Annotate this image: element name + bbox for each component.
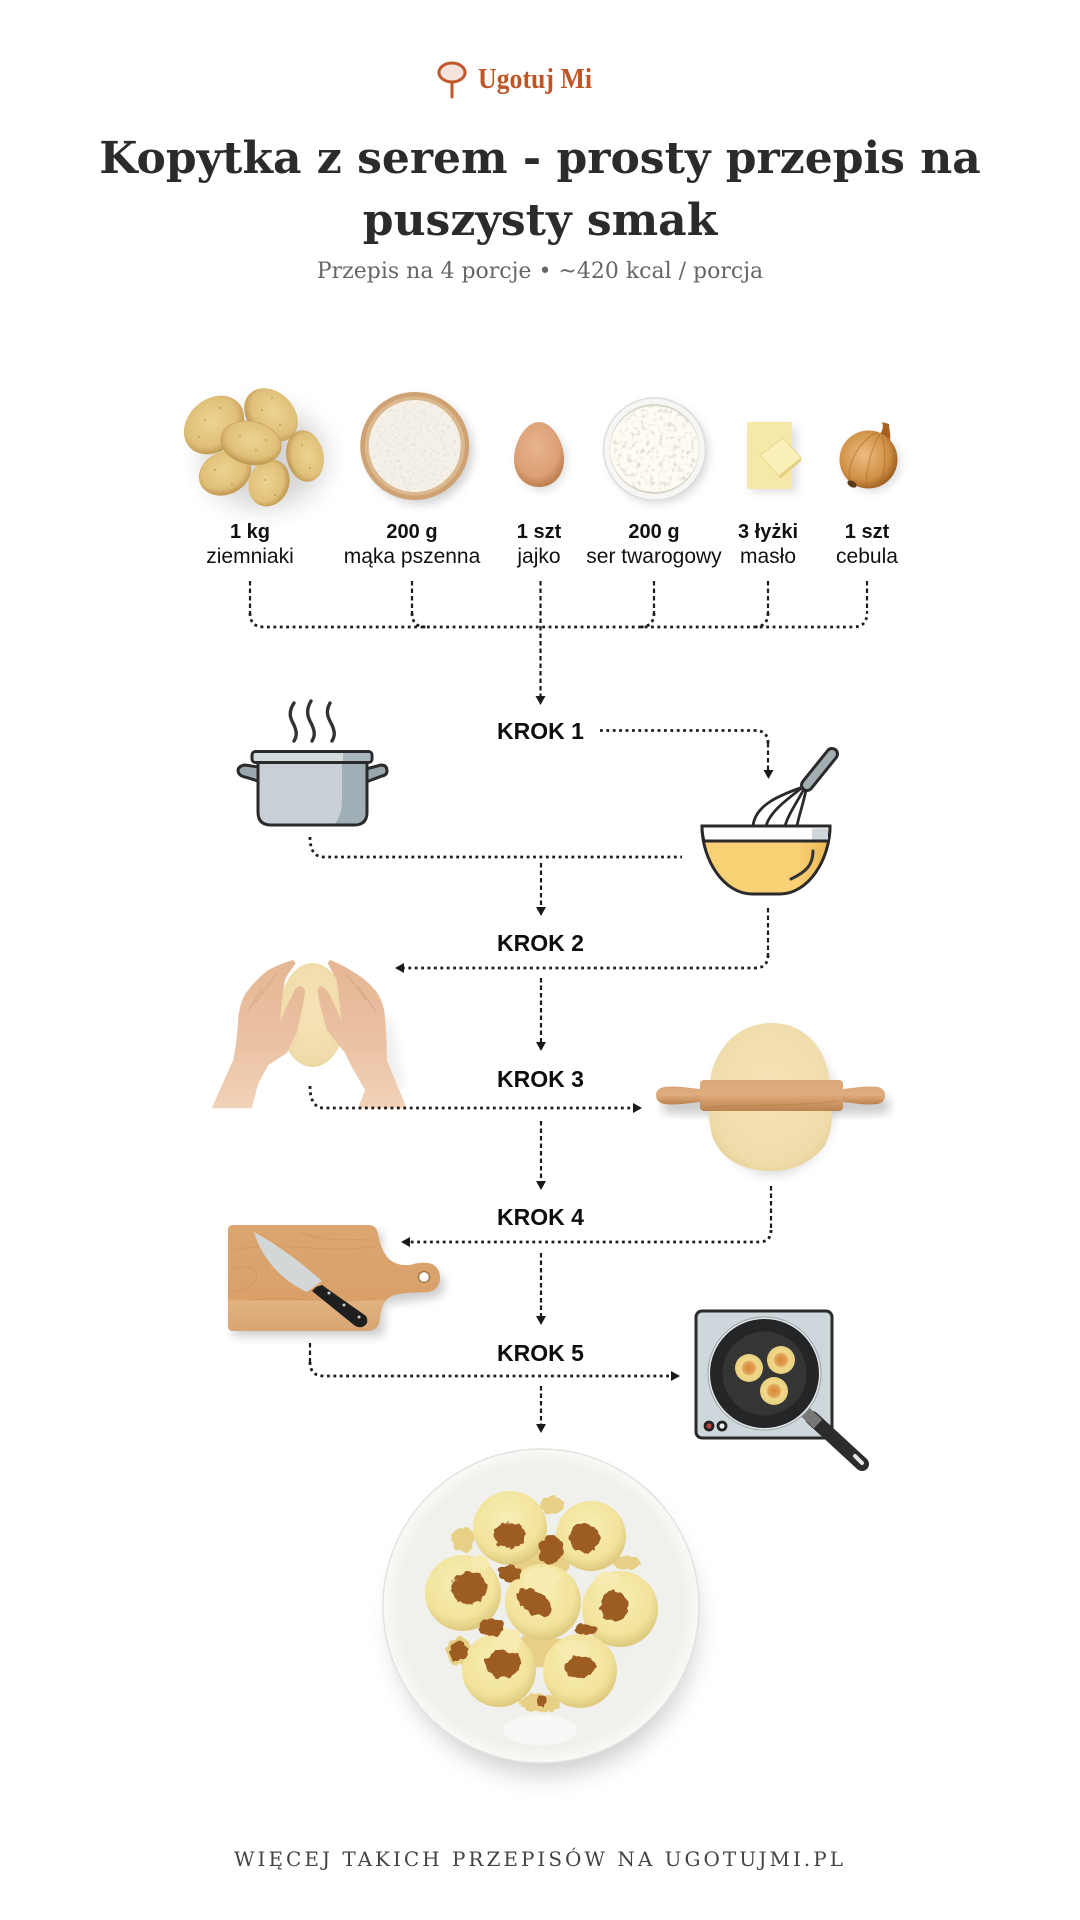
- subtitle: Przepis na 4 porcje • ~420 kcal / porcja: [317, 259, 763, 284]
- label: potatoes: [206, 521, 294, 568]
- label: potatoes: 1 kg: [230, 521, 270, 543]
- body: [258, 762, 367, 825]
- knife handle: [312, 1285, 367, 1327]
- icon: pan on hob: [696, 1311, 862, 1464]
- burners: [705, 1422, 713, 1430]
- label: egg: [516, 521, 562, 568]
- icon: onion: [840, 422, 900, 491]
- plate shadow: [395, 1474, 695, 1774]
- step 4 label: KROK 4: [497, 1204, 584, 1230]
- icon: potatoes: [172, 378, 329, 513]
- arrow: step 2 to step 3: [536, 978, 546, 1051]
- kopytka: [425, 1491, 658, 1708]
- knife blade: [254, 1232, 322, 1292]
- icon: whisk and bowl: [702, 754, 832, 894]
- label: flour: mąka pszenna: [344, 545, 481, 568]
- arrow: step 1 to bowl: [600, 730, 774, 779]
- melted cheese: [471, 1555, 619, 1659]
- pin handles: [656, 1086, 700, 1104]
- butter pools: [446, 1496, 641, 1712]
- label: egg: 1 szt: [517, 521, 562, 543]
- plate: [383, 1449, 699, 1763]
- handles: [238, 765, 258, 781]
- title: Kopytka z serem - prosty przepis na: [99, 133, 981, 184]
- right hand: [318, 960, 407, 1108]
- pan: [708, 1317, 821, 1430]
- label: butter: 3 łyżki: [738, 521, 798, 543]
- label: flour: [344, 521, 481, 568]
- kopytka: [735, 1354, 763, 1382]
- icon: rolling pin on dough: [656, 1023, 890, 1176]
- label: onion: 1 szt: [845, 521, 890, 543]
- arrow: step 5 to dish: [536, 1386, 546, 1433]
- handle: [812, 1418, 862, 1464]
- step 1 label: KROK 1: [497, 718, 584, 744]
- arrow: pot to step 2: [310, 837, 682, 916]
- label: cheese: 200 g: [628, 521, 680, 543]
- wood grain: [232, 1232, 376, 1301]
- brand name: Ugotuj Mi: [478, 64, 592, 95]
- arrow: cutting to frying: [310, 1343, 680, 1381]
- arrow: step 3 to step 4: [536, 1121, 546, 1190]
- arrow: rolling to cutting: [401, 1186, 771, 1247]
- footer: WIĘCEJ TAKICH PRZEPISÓW NA UGOTUJMI.PL: [234, 1846, 846, 1871]
- finger creases: [248, 974, 376, 1012]
- step 5 label: KROK 5: [497, 1340, 584, 1366]
- label: onion: [836, 521, 898, 568]
- icon: butter: [747, 422, 801, 492]
- label: butter: [738, 521, 798, 568]
- pin barrel: [700, 1080, 843, 1111]
- icon: flour bowl: [360, 392, 473, 504]
- arrow: dough to rolling: [310, 1086, 642, 1113]
- ingredient labels: [206, 521, 898, 568]
- icon: cottage cheese bowl: [604, 398, 708, 503]
- icon: spoon logo: [439, 63, 465, 97]
- icon: steaming pot: [238, 701, 387, 825]
- left hand: [212, 960, 305, 1108]
- step 3 label: KROK 3: [497, 1066, 584, 1092]
- final dish: [383, 1449, 699, 1774]
- title second line: puszysty smak: [363, 195, 719, 246]
- whisk: [753, 787, 806, 826]
- step 2 label: KROK 2: [497, 930, 584, 956]
- lid rim: [252, 752, 372, 762]
- steam: [290, 701, 334, 741]
- label: cheese: ser twarogowy: [586, 545, 722, 568]
- label: potatoes: ziemniaki: [206, 545, 294, 568]
- bowl: [702, 826, 830, 894]
- plate highlight: [503, 1715, 577, 1745]
- label: flour: 200 g: [386, 521, 438, 543]
- label: cheese: [586, 521, 722, 568]
- label: egg: jajko: [516, 545, 561, 568]
- arrow: ingredients merge into step 1: [250, 581, 867, 705]
- dough sheet: [708, 1023, 832, 1171]
- label: butter: masło: [740, 545, 796, 568]
- fried onion topping: [450, 1522, 628, 1707]
- icon: cutting board and knife: [228, 1225, 444, 1336]
- icon: egg: [514, 422, 566, 490]
- arrow: bowl to kneading: [395, 908, 768, 973]
- logo: [439, 63, 592, 97]
- arrow: step 4 to step 5: [536, 1253, 546, 1325]
- label: onion: cebula: [836, 545, 898, 568]
- icon: hands kneading dough: [212, 960, 407, 1108]
